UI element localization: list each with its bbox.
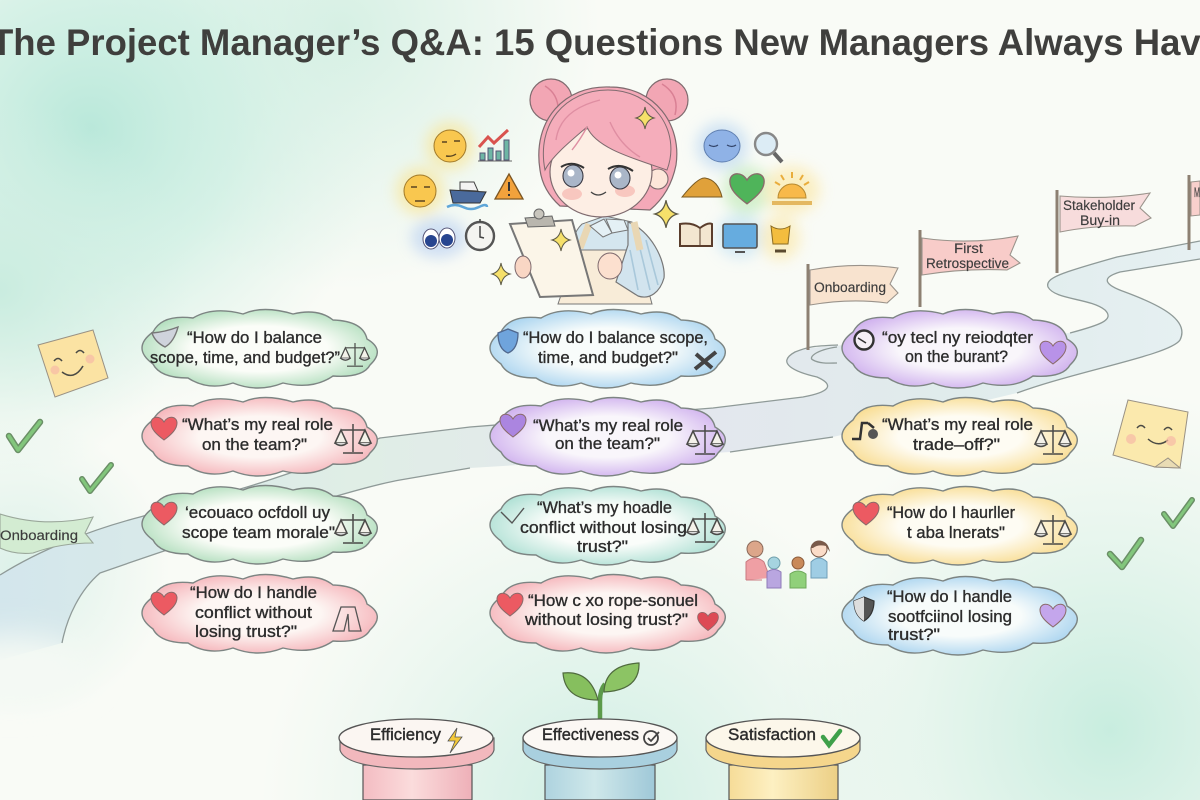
cloud: real role purple: on the team?"	[555, 435, 660, 453]
question clouds column 1	[142, 310, 377, 653]
cloud: conflict without losing trust: “What’s my hoadle	[537, 499, 672, 517]
cloud: budget purple	[842, 310, 1077, 388]
cloud: without losing trust	[490, 574, 725, 653]
cloud: handle conflict: conflict without	[195, 604, 312, 622]
cloud: balance scope: time, and budget?"	[538, 349, 678, 367]
flag: Onboarding	[808, 264, 898, 350]
cloud: real role purple: “What’s my real role	[533, 417, 683, 435]
cloud: scope time budget	[142, 310, 377, 388]
pillar: Effectiveness: Effectiveness	[542, 725, 639, 744]
question clouds column 3	[842, 310, 1077, 655]
icon: sun	[772, 172, 812, 203]
cloud: scope time budget: “How do I balance	[187, 329, 322, 347]
cloud: handle conflict	[142, 574, 377, 653]
icon: stopwatch	[466, 219, 494, 250]
icon: trophy	[771, 226, 790, 251]
cloud: blue shield: sootfciinol losing	[888, 608, 1012, 626]
icon: warning	[495, 174, 523, 199]
cloud: blue shield	[842, 576, 1077, 655]
cloud: budget purple: on the burant?	[905, 348, 1008, 366]
icon: magnifier	[755, 133, 782, 162]
cloud: trade-off: “What’s my real role	[882, 416, 1033, 434]
icon: eyes	[423, 228, 455, 249]
pillar: Efficiency: Efficiency	[370, 725, 441, 744]
cloud: scope team morale: scope team morale"	[182, 524, 335, 542]
cloud: scope team morale: ‘ecouaco ocfdoll uy	[185, 504, 331, 522]
cloud: blue shield: “How do I handle	[887, 588, 1012, 606]
cloud: real role: on the team?"	[202, 436, 307, 454]
character: girl with clipboard	[510, 79, 688, 304]
flag: left Onboarding: Onboarding	[0, 528, 78, 543]
cloud: trade-off	[842, 398, 1077, 476]
flag: First Retrospective: Retrospective	[926, 256, 1009, 271]
cloud: balance scope	[490, 310, 725, 388]
icon: book	[680, 224, 712, 246]
flag: First Retrospective: First	[954, 241, 983, 256]
cloud: budget purple: “oy tecl ny reiodqter	[882, 329, 1034, 347]
flag: First Retrospective	[920, 230, 1020, 307]
cloud: yellow heart: “How do I haurller	[887, 504, 1015, 522]
cloud: without losing trust: “How c xo rope-sonuel	[528, 592, 698, 610]
pillar: Efficiency	[339, 719, 494, 800]
pillar: Effectiveness	[523, 719, 677, 800]
icon: growth chart	[478, 130, 512, 161]
winding road	[0, 241, 1200, 700]
flag: left Onboarding	[0, 514, 93, 553]
question clouds column 2	[490, 310, 725, 653]
cloud: scope team morale	[142, 486, 377, 564]
icon: green heart	[730, 174, 764, 204]
cloud: yellow heart: t aba lnerats"	[907, 524, 1005, 542]
icon: ship	[447, 182, 487, 209]
pillar: Satisfaction	[706, 719, 860, 800]
icon: monitor	[723, 224, 757, 252]
sticky note right	[1113, 400, 1188, 468]
icon: face 1	[434, 130, 466, 162]
icon: sprout	[563, 663, 639, 722]
flag: Stakeholder Buy-in: Buy-in	[1080, 213, 1120, 228]
flag: Stakeholder Buy-in: Stakeholder	[1063, 198, 1135, 213]
cloud: yellow heart	[842, 486, 1077, 565]
cloud: real role purple	[490, 398, 725, 476]
icon: face 2	[404, 175, 436, 207]
cloud: real role: “What’s my real role	[182, 416, 333, 434]
flag: Stakeholder Buy-in	[1057, 190, 1151, 273]
sticky note left	[38, 330, 108, 397]
check marks	[9, 422, 1192, 567]
cloud: handle conflict: losing trust?"	[195, 623, 297, 641]
cloud: conflict without losing trust	[490, 486, 725, 565]
cloud: trade-off: trade–off?"	[913, 436, 1000, 454]
team of people holding hands	[746, 541, 830, 588]
cloud: real role	[142, 398, 377, 476]
icon glows	[396, 122, 820, 260]
icon: mound	[682, 178, 722, 197]
cloud: conflict without losing trust: conflict without losing	[520, 519, 687, 537]
flag: Onboarding: Onboarding	[814, 280, 886, 295]
cloud: scope time budget: scope, time, and budget?”	[150, 349, 340, 367]
cloud: conflict without losing trust: trust?"	[577, 538, 628, 556]
cloud: without losing trust: without losing trust?"	[524, 611, 688, 629]
cloud: handle conflict: “How do I handle	[190, 584, 317, 602]
flag: cropped right	[1189, 175, 1200, 250]
pillar: Satisfaction: Satisfaction	[728, 725, 816, 744]
icon: sleepy blue face	[704, 130, 740, 162]
cloud: balance scope: “How do I balance scope,	[523, 329, 708, 347]
sparkles	[492, 107, 677, 285]
cloud: blue shield: trust?"	[888, 626, 940, 644]
